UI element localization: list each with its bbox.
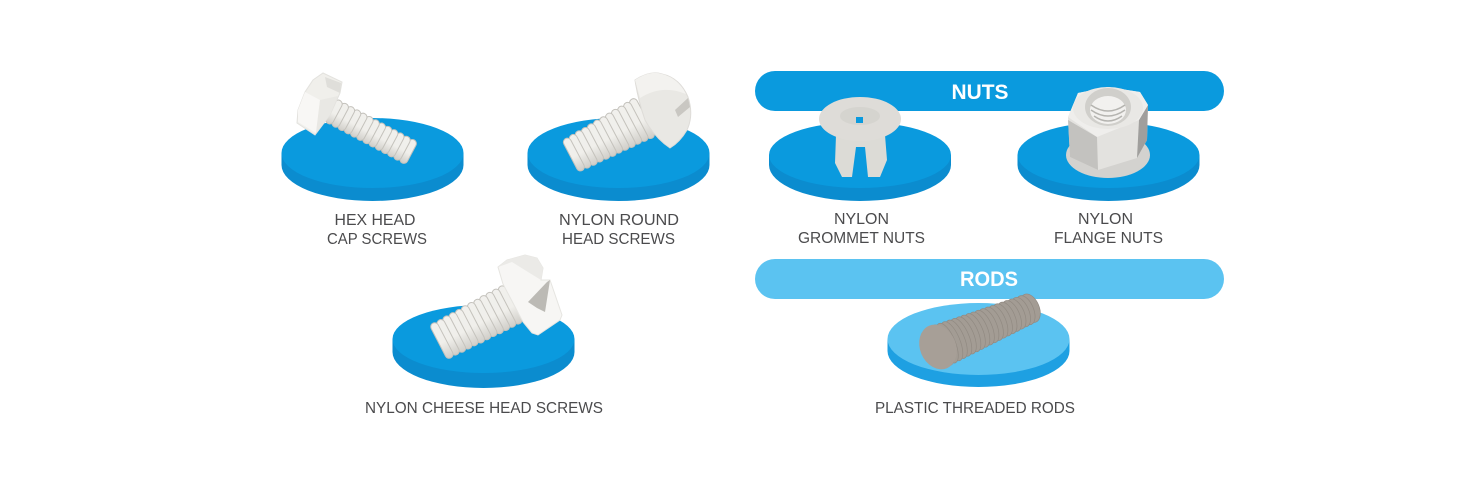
label: nylon flange nuts: NYLON: [1078, 211, 1133, 228]
label: nylon flange nuts: FLANGE NUTS: [1054, 230, 1163, 247]
heading bar: nuts: [755, 71, 1224, 111]
label: nylon round head screws: NYLON ROUND: [559, 212, 679, 229]
disc: flange: [1018, 122, 1200, 201]
label: nylon cheese head screws: NYLON CHEESE HEAD SCREWS: [365, 400, 603, 417]
icon: hex head screw: [297, 73, 418, 165]
icon: round head screw: [560, 73, 691, 176]
item: nylon round head screws: [528, 73, 710, 248]
disc: round head: [528, 118, 710, 201]
icon: cheese head screw: [429, 255, 562, 361]
label: plastic threaded rods: PLASTIC THREADED RODS: [875, 400, 1075, 417]
label: hex head cap screws: HEX HEAD: [334, 212, 416, 229]
label: hex head cap screws: CAP SCREWS: [327, 231, 427, 248]
item: hex head cap screws: [282, 73, 464, 248]
disc: cheese head: [392, 305, 574, 388]
label: nylon grommet nuts: GROMMET NUTS: [798, 230, 925, 247]
heading bar: rods: RODS: [960, 268, 1018, 291]
disc: hex head: [282, 118, 464, 201]
heading bar: rods: [755, 259, 1224, 299]
icon: threaded rod: [912, 284, 1047, 375]
label: nylon grommet nuts: NYLON: [834, 211, 889, 228]
item: nylon flange nuts: [1018, 87, 1200, 247]
icon: grommet nut: [819, 97, 901, 177]
item: plastic threaded rods: [875, 284, 1075, 417]
disc: rod: [888, 303, 1070, 387]
heading bar: nuts: NUTS: [952, 81, 1008, 104]
icon: flange nut: [1066, 87, 1150, 178]
disc: grommet: [769, 122, 951, 201]
item: nylon grommet nuts: [769, 97, 951, 247]
label: nylon round head screws: HEAD SCREWS: [562, 231, 675, 248]
item: nylon cheese head screws: [365, 255, 603, 417]
